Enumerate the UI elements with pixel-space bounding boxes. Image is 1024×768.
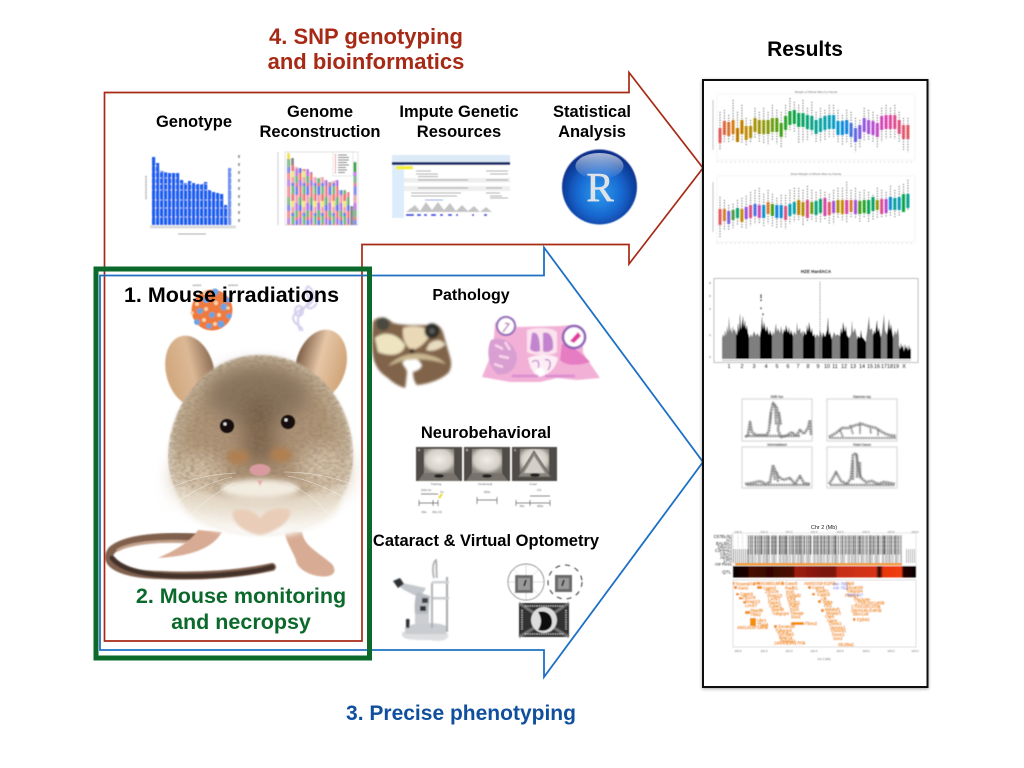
strain labels (714, 534, 733, 574)
strain labels: BALB/cJ (716, 541, 732, 546)
chart: Chr 2 haplotype and gene map: 2900040J04Rik (851, 608, 882, 613)
chromosome axis labels: 8 (806, 364, 810, 370)
text: mouse irradiations: 1. Mouse irradiations (124, 283, 339, 307)
axis ticks: 102.0 (810, 530, 818, 534)
panel: results (703, 80, 928, 687)
chromosome axis labels (727, 364, 906, 370)
mouse nose and mouth (250, 464, 270, 486)
chromosome axis labels: 15 (867, 364, 873, 370)
chart legend (333, 152, 353, 176)
chromosome axis labels: 9 (816, 364, 820, 370)
chart: Chr 2 haplotype and gene map: Itpka (823, 600, 833, 604)
protocol timelines (419, 494, 550, 506)
timeline labels: CS (537, 488, 541, 492)
chart: Chr 2 haplotype and gene map: 1700029I15Rik (851, 604, 881, 609)
chart: Chr 2 haplotype and gene map: Pla2g4 (845, 593, 859, 598)
chart: Chr 2 haplotype and gene map: Ltk (821, 596, 828, 601)
chromosome axis labels: 17 (881, 364, 887, 370)
strain labels: C3H/HeJ (715, 548, 732, 553)
strain labels: cor-Res1 (715, 562, 733, 566)
image: optomotor rotation diagram (508, 564, 582, 637)
chart: Chr 2 haplotype and gene map: Snap23 (745, 599, 761, 604)
chart: four QTL scatter panels: Unirradiated (767, 443, 787, 447)
black chromosome columns (736, 313, 911, 359)
chart: Chr 2 haplotype and gene map: Haus2 (768, 600, 781, 605)
chart: Chr 2 haplotype and gene map: Tmem87a (735, 582, 755, 586)
chart: Chr 2 haplotype and gene map: Knl1 (786, 590, 795, 594)
chart: Chr 2 haplotype and gene map: Zfp106 (742, 595, 756, 600)
chart: four QTL scatter panels (742, 395, 897, 488)
axis ticks: 101.5 (786, 649, 793, 653)
label: impute genetic resources: Resources (417, 123, 501, 141)
axis ticks (734, 530, 919, 661)
chart: Chr 2 haplotype and gene map: Slc28a2 (838, 642, 854, 647)
chart: manhattan plot: 8 (709, 281, 711, 285)
chart: Chr 2 haplotype and gene map: Patl2 (789, 604, 800, 608)
chart: Chr 2 haplotype and gene map: Tubgcp4 (846, 588, 863, 594)
chart: Chr 2 haplotype and gene map: Map1a (779, 635, 793, 640)
label: neurobehavioral: Neurobehavioral (421, 424, 551, 442)
timeline labels: 90s (520, 504, 525, 508)
icon: R logo (562, 150, 637, 224)
label: mouse monitoring and necropsy: 2. Mouse monitoring (136, 584, 346, 608)
label: mouse monitoring and necropsy: and necropsy (171, 610, 311, 634)
chart: manhattan plot: 0 (709, 355, 711, 359)
axis ticks: 102.5 (836, 530, 844, 534)
mouse photograph illustration (109, 324, 355, 576)
chart: Chr 2 haplotype and gene map: Zfp106 (765, 589, 779, 594)
chart: Chr 2 haplotype and gene map: Rad51 (816, 588, 829, 594)
chart: manhattan plot: 6 (709, 294, 711, 298)
axis ticks: Chr 2 (Mb) (817, 657, 831, 661)
axis ticks: 103.5 (888, 530, 895, 534)
chart: box plot top (713, 90, 915, 162)
image: slit lamp (392, 560, 449, 641)
chart: Chr 2 haplotype and gene map: Tubgcp4 (775, 628, 792, 633)
chromosome axis labels: 4 (764, 364, 768, 370)
strain labels: QTL (722, 570, 731, 574)
arrow: precise phenotyping (100, 248, 703, 677)
heading: SNP genotyping: and bioinformatics (268, 49, 464, 74)
chart: Chr 2 haplotype and gene map: Casc5 (785, 581, 798, 586)
chart: Chr 2 haplotype and gene map (714, 525, 919, 661)
green box: mouse monitoring (96, 269, 370, 658)
timeline labels: 30s CS (432, 510, 442, 514)
chart: Chr 2 haplotype and gene map: Zscan29 (778, 624, 795, 629)
axis ticks: 103.0 (862, 649, 870, 653)
chart: Chr 2 haplotype and gene map: Stard9 (750, 608, 763, 613)
strain labels: CBA/J (720, 552, 732, 556)
chart: Chr 2 haplotype and gene map: Tp53bp1 (777, 632, 795, 636)
image: H&E stained section (482, 316, 600, 382)
strain labels: DBA/2J (718, 544, 732, 550)
label: genotype: Genotype (156, 113, 232, 131)
chart: manhattan plot (709, 269, 918, 370)
images: fear conditioning chambers: B. (466, 448, 469, 452)
mouse ears (158, 324, 355, 412)
chromosome axis labels: 19 (893, 364, 899, 370)
chart: Chr 2 haplotype and gene map: Duoxa1 (831, 628, 847, 633)
chromosome axis labels: 16 (874, 364, 880, 370)
strain labels: A/J (726, 538, 732, 542)
chart: Chr 2 haplotype and gene map: 1700020I14Rik (855, 600, 885, 606)
axis ticks: 104.0 (912, 649, 919, 653)
icon: proton and neutron nucleus: neutron (228, 283, 238, 287)
chromosome axis labels: 2 (740, 364, 744, 370)
timeline labels: Contextual (478, 482, 493, 486)
chart: Chr 2 haplotype and gene map: Spg11 (788, 600, 801, 605)
image: gross tissue section (372, 318, 451, 388)
timeline labels: Fs (440, 490, 444, 494)
images: fear conditioning chambers: C. (514, 448, 517, 452)
chart: Chr 2 haplotype and gene map: Trim69 (790, 611, 804, 616)
chart: Chr 2 haplotype and gene map: Duox1 (832, 632, 845, 637)
images: fear conditioning chambers (416, 447, 557, 514)
axis ticks: 101.5 (786, 530, 793, 534)
strain labels: LP/J (724, 558, 732, 563)
chart: Chr 2 haplotype and gene map: mir-7b3 (833, 582, 848, 586)
chart: Chr 2 haplotype and gene map: Sord (791, 614, 801, 620)
images: fear conditioning chambers: A. (418, 448, 421, 452)
chromosome axis labels: 12 (841, 364, 847, 370)
axis ticks: 102.5 (836, 649, 844, 653)
chromosome axis labels: 5 (775, 364, 779, 370)
axis ticks: 103.5 (888, 649, 895, 653)
chart: Chr 2 haplotype and gene map: Oip5 (825, 614, 835, 619)
chart: box plot bottom: Dried Weight of Whole Mice by Family (791, 172, 842, 176)
chart: Chr 2 haplotype and gene map: Cdan1 (769, 604, 782, 608)
timeline labels: Training (431, 482, 442, 486)
strain labels: C57BL/6J (714, 534, 732, 539)
label: pathology: Pathology (432, 287, 510, 304)
chart: Chr 2 haplotype and gene map: Epb42 (857, 617, 870, 622)
icon: R logo: R (586, 164, 614, 210)
chart: Chr 2 haplotype and gene map: Bloc1s6 (853, 612, 869, 616)
chart: Chr 2 haplotype and gene map: Cass4 (812, 585, 825, 590)
chart: Chr 2 haplotype and gene map: Chr 2 (Mb) (811, 525, 837, 531)
chart: Chr 2 haplotype and gene map: A930033H02Rik (804, 581, 837, 586)
chart: Chr 2 haplotype and gene map: Ppip5k1 (780, 638, 796, 644)
chart: Chr 2 haplotype and gene map: Rtf1 (824, 603, 833, 608)
chromosome axis labels: 6 (786, 364, 790, 370)
chart: four QTL scatter panels: Total Cases (853, 443, 871, 447)
label: genome reconstruction: Reconstruction (259, 123, 381, 141)
icon: proton and neutron nucleus (190, 283, 238, 330)
screenshot: impute genetic resources web page (392, 155, 510, 218)
axis ticks: 104.0 (912, 530, 919, 534)
chromosome axis labels: X (902, 364, 906, 370)
mouse body (168, 355, 353, 537)
chart: Chr 2 haplotype and gene map: Tubgcp4 (772, 611, 789, 616)
chart: manhattan plot: 2 (709, 333, 711, 337)
chart: Chr 2 haplotype and gene map: Ganc (738, 586, 749, 590)
chart: Chr 2 haplotype and gene map: Lrrc57 (768, 596, 781, 602)
chart: Chr 2 haplotype and gene map: Fbxo2 (805, 621, 818, 626)
chart: Chr 2 haplotype and gene map: Nusap1 (826, 610, 842, 616)
chart: Chr 2 haplotype and gene map: B2m (790, 607, 799, 612)
timeline labels: 120s Av (421, 488, 432, 492)
chart: Chr 2 haplotype and gene map: Ctdspl2 (786, 593, 801, 598)
chart: Chr 2 haplotype and gene map: Zscan29 (846, 585, 863, 590)
chromosome axis labels: 18 (887, 364, 893, 370)
chromosome axis labels: 13 (850, 364, 856, 370)
chart: Chr 2 haplotype and gene map: mir-7b3 (833, 586, 848, 590)
chart: Chr 2 haplotype and gene map: Sord (833, 636, 843, 641)
label: impute genetic resources: Impute Genetic (399, 103, 519, 121)
mouse forepaws (233, 508, 290, 535)
chart: box plot top: Weight of Whole Mice by Family (795, 90, 838, 94)
label: precise phenotyping: 3. Precise phenotyping (346, 702, 576, 725)
chromosome axis labels: 1 (727, 364, 731, 370)
chart: Chr 2 haplotype and gene map: Pla2g4e (854, 597, 871, 602)
chart: Chr 2 haplotype and gene map: Stard9 (771, 607, 784, 612)
chromosome axis labels: 11 (832, 364, 838, 370)
chart: Chr 2 haplotype and gene map: Duoxa2 (830, 625, 846, 630)
label: statistical analysis: Statistical (553, 103, 631, 121)
timeline labels: 90s (422, 510, 427, 514)
axis ticks: 100.6 (734, 530, 742, 534)
chart: Chr 2 haplotype and gene map: Capn3 (817, 592, 830, 597)
label: cataract and virtual optometry: Cataract & Virtual Optometry (373, 532, 600, 550)
chart: Chr 2 haplotype and gene map: Capn3 (763, 586, 776, 590)
chart: genotype marker bars (146, 155, 239, 234)
chart: genome reconstruction stacked bars (278, 152, 358, 225)
chart: Chr 2 haplotype and gene map: Oip5 (845, 581, 855, 586)
icon: proton and neutron nucleus: proton (193, 283, 202, 287)
arrow: SNP genotyping and bioinformatics (104, 72, 703, 641)
chromosome axis labels: 10 (824, 364, 830, 370)
QTL heat band (733, 566, 916, 578)
chart: Chr 2 haplotype and gene map: Ubr1 (757, 618, 767, 623)
mouse tail (109, 537, 272, 576)
axis ticks: 101.0 (760, 649, 768, 653)
mouse legs and hind feet (158, 530, 334, 576)
chart: Chr 2 haplotype and gene map: Ndufaf1 (825, 607, 841, 612)
gray chromosome columns (722, 314, 899, 359)
gene panel (733, 580, 916, 647)
timeline labels (421, 482, 544, 514)
chart: Chr 2 haplotype and gene map: Ganc (827, 618, 838, 623)
timeline labels: Cued (529, 482, 537, 486)
chart: Chr 2 haplotype and gene map: Duox2 (829, 621, 842, 626)
chart: Chr 2 haplotype and gene map: 9930038B18Rik (753, 581, 785, 586)
chart: Chr 2 haplotype and gene map: SNV147 (847, 592, 864, 598)
heading: SNP genotyping: 4. SNP genotyping (269, 24, 463, 49)
chart: Chr 2 haplotype and gene map: Tfap4 (757, 622, 769, 627)
axis ticks: 103.0 (862, 530, 870, 534)
label: genome reconstruction: Genome (287, 103, 353, 121)
chart: Chr 2 haplotype and gene map: Rad51 (785, 586, 798, 590)
chromosome axis labels: 7 (796, 364, 800, 370)
chart: Chr 2 haplotype and gene map: Snap23 (767, 593, 783, 598)
chart: Chr 2 haplotype and gene map: 4931414P19Rik (737, 625, 769, 630)
mouse eyes (220, 415, 295, 433)
timeline labels: 180s (537, 504, 544, 508)
heading: results: Results (767, 38, 843, 61)
gene tracks (733, 582, 856, 628)
axis ticks: 102.0 (810, 649, 818, 653)
image: virtual drum maze (519, 603, 569, 637)
chart: Chr 2 haplotype and gene map: Eif3j (787, 596, 796, 602)
label: statistical analysis: Analysis (558, 123, 626, 141)
chart: Chr 2 haplotype and gene map: Capn3 (740, 592, 753, 596)
chart: four QTL scatter panels: Gamma ray (853, 395, 871, 399)
axis ticks: 100.6 (734, 649, 742, 653)
chart: Chr 2 haplotype and gene map: 1600023N17Rik (774, 640, 806, 646)
icon: DNA strand (293, 286, 319, 331)
chromosome axis labels: 3 (752, 364, 756, 370)
chart: manhattan plot: HZE HardACA (801, 269, 832, 274)
strain labels: AKR/J (720, 555, 732, 560)
chart: Chr 2 haplotype and gene map: Lrrc57 (745, 603, 758, 608)
chart: box plot bottom (713, 172, 915, 243)
haplotype stripes (748, 535, 902, 563)
chart: manhattan plot: 4 (709, 307, 711, 311)
chart: Chr 2 haplotype and gene map: Ttbk2 (750, 612, 762, 617)
timeline labels: 300s (484, 490, 491, 494)
label: mouse irradiations (124, 283, 339, 331)
chromosome axis labels: 14 (859, 364, 865, 370)
axis ticks: 101.0 (760, 530, 768, 534)
chart: four QTL scatter panels: HZE Ion (771, 395, 783, 399)
